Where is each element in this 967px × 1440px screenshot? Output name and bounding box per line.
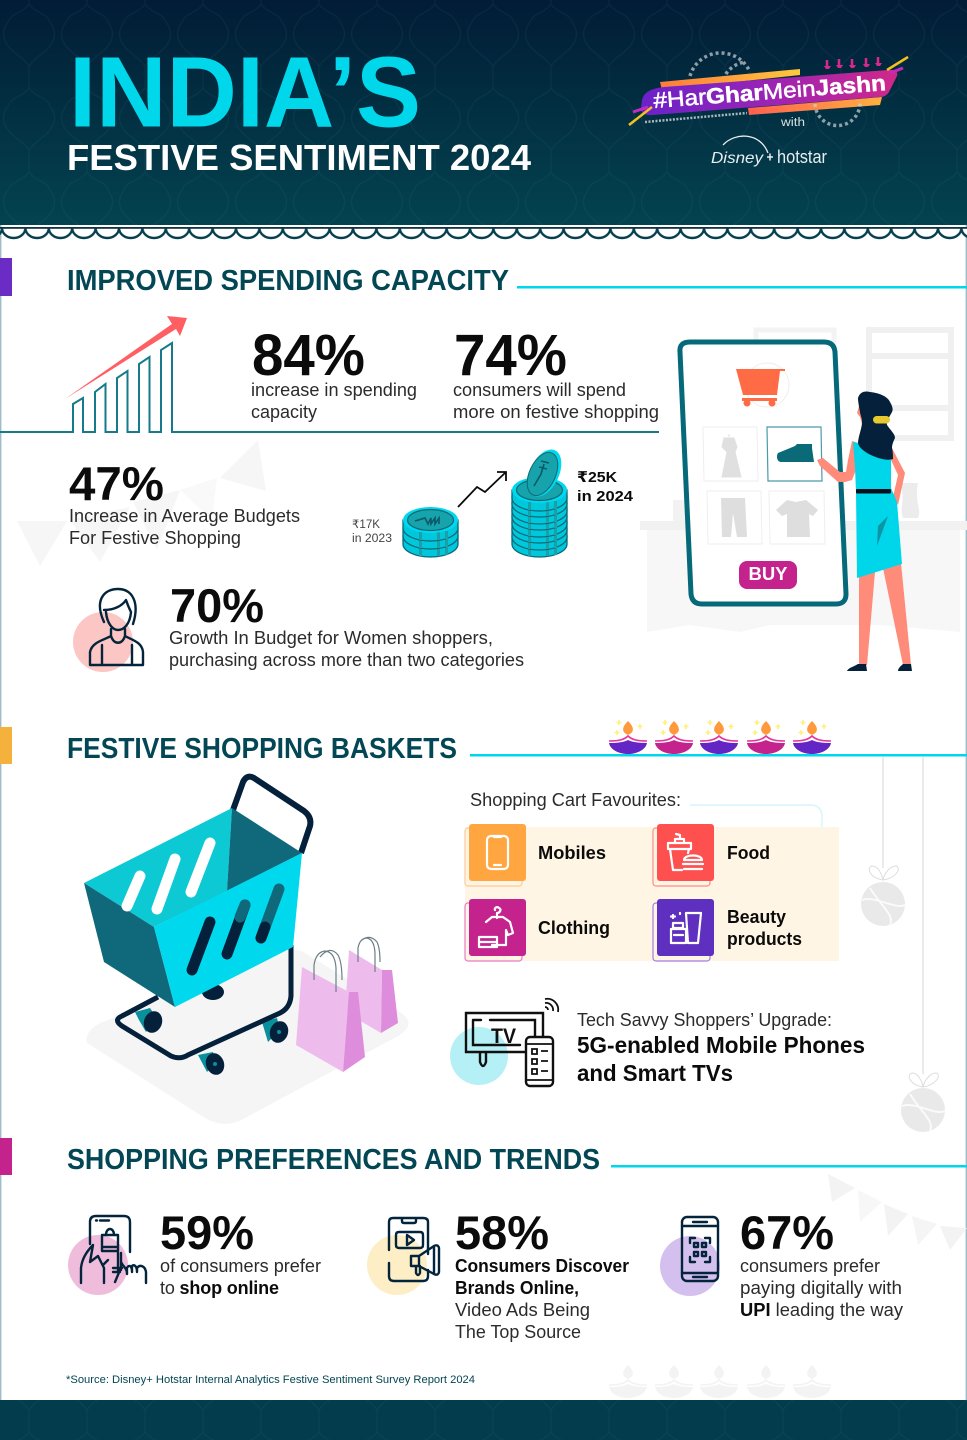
icon: woman shopper [73, 589, 143, 672]
big coin stack [512, 444, 568, 557]
subtitle: FESTIVE SENTIMENT 2024 [67, 137, 531, 178]
item: mobiles: Mobiles [538, 843, 606, 863]
chart icon: growth bars with arrow [0, 316, 659, 432]
stat: 59%: of consumers prefer [160, 1256, 321, 1276]
item: beauty products [653, 899, 802, 961]
text: tech savvy shoppers: Tech Savvy Shoppers’ Upgrade: [577, 1010, 832, 1030]
text: tech savvy shoppers [577, 1010, 865, 1086]
panel: bunting left [17, 440, 266, 566]
stat: 59% [160, 1206, 321, 1298]
item: clothing [465, 899, 610, 961]
stat: 59%: to shop online [160, 1278, 279, 1298]
floor shadow [87, 949, 409, 1124]
illustration: shopping cart [84, 777, 409, 1124]
stat: 58%: Consumers Discover [455, 1256, 629, 1276]
chart: coin stacks 2023 vs 2024: ₹17K [352, 519, 380, 531]
heading: shopping cart favourites: Shopping Cart Favourites: [470, 790, 681, 810]
phone frame [680, 342, 846, 604]
small coin stack [403, 507, 458, 557]
campaign logo: #HarGharMeinJashn [652, 70, 887, 113]
source note: *Source: Disney+ Hotstar Internal Analytics Festive Sentiment Survey Report 2024 [66, 1374, 475, 1386]
icon: TV and phone [450, 999, 558, 1086]
panel: cart favourites [465, 824, 839, 961]
item: beauty products: Beauty [727, 907, 786, 927]
campaign logo: with [780, 117, 805, 129]
stat: 67%: consumers prefer [740, 1256, 880, 1276]
footer band [0, 1400, 967, 1440]
woman figure [817, 392, 912, 671]
illustration: phone shop with woman [680, 342, 912, 671]
stat: 47%: For Festive Shopping [69, 528, 241, 548]
chart: coin stacks 2023 vs 2024: in 2023 [352, 533, 392, 545]
faded diyas [609, 1365, 831, 1398]
stat: 58%: Brands Online, [455, 1278, 579, 1298]
title: INDIA'S: INDIA’S [69, 36, 421, 148]
hanging ornaments [861, 757, 945, 1132]
stat: 67% [740, 1206, 903, 1320]
item: mobiles [465, 824, 606, 886]
stat: 59%: 59% [160, 1206, 254, 1259]
stat: 84%: 84% [252, 323, 365, 388]
icon row: diyas [609, 720, 831, 754]
stat: 84%: capacity [251, 402, 317, 422]
item: clothing: Clothing [538, 918, 610, 938]
section marker: yellow [0, 727, 12, 764]
heading: shopping preferences and trends: SHOPPING PREFERENCES AND TRENDS [67, 1144, 600, 1176]
button: BUY: BUY [748, 564, 788, 584]
product: dress [703, 427, 758, 481]
campaign logo: Disney [711, 150, 764, 167]
stat: 84% [251, 323, 417, 422]
item: food [653, 824, 770, 886]
stat: 74%: consumers will spend [453, 380, 626, 400]
section marker: purple [0, 258, 12, 296]
stat: 74%: 74% [454, 323, 567, 388]
back wheels and frame [118, 945, 291, 1077]
chart: coin stacks 2023 vs 2024 [352, 444, 634, 557]
stat: 74% [453, 323, 659, 422]
stat: 47%: Increase in Average Budgets [69, 506, 300, 526]
stat: 70%: purchasing across more than two categories [169, 650, 524, 670]
stat: 67%: paying digitally with [740, 1278, 902, 1298]
heading: festive shopping baskets: FESTIVE SHOPPING BASKETS [67, 733, 457, 765]
stat: 70%: 70% [170, 579, 264, 632]
section marker: magenta [0, 1138, 12, 1175]
stat: 67%: UPI leading the way [740, 1300, 903, 1320]
product: trousers [707, 491, 762, 544]
icon: cart in phone [736, 363, 789, 407]
chart: coin stacks 2023 vs 2024: ₹25K [577, 469, 617, 486]
icon: UPI payment [660, 1217, 720, 1296]
icon: trend arrow [458, 472, 506, 507]
product: shoe selected [767, 427, 822, 481]
shopping bags [296, 937, 398, 1072]
item: food: Food [727, 843, 770, 863]
stat: 70% [169, 579, 524, 670]
text: tech savvy shoppers: and Smart TVs [577, 1060, 733, 1086]
stat: 58%: Video Ads Being [455, 1300, 590, 1320]
button: BUY [739, 561, 797, 589]
campaign logo: hotstar [777, 147, 827, 167]
icon: rising arrow [65, 316, 187, 399]
stat: 58%: The Top Source [455, 1322, 581, 1342]
scalloped divider [0, 227, 967, 240]
icon: shop online [68, 1216, 146, 1295]
icon: video ads [367, 1218, 439, 1295]
panel: background room illustration [640, 330, 967, 632]
stat: 47%: 47% [69, 457, 164, 510]
bunting right [828, 1174, 967, 1250]
handle [233, 777, 310, 853]
stat: 84%: increase in spending [251, 380, 417, 400]
text: tech savvy shoppers: 5G-enabled Mobile Phones [577, 1032, 865, 1058]
stat: 58% [455, 1206, 629, 1342]
stat: 74%: more on festive shopping [453, 402, 659, 422]
heading: improved spending capacity: IMPROVED SPENDING CAPACITY [67, 265, 509, 297]
stat: 47% [69, 457, 300, 548]
stat: 67%: 67% [740, 1206, 834, 1259]
stat: 58%: 58% [455, 1206, 549, 1259]
header banner [0, 0, 967, 225]
item: beauty products: products [727, 929, 802, 949]
stat: 70%: Growth In Budget for Women shoppers, [169, 628, 493, 648]
product: t-shirt [769, 491, 825, 544]
basket [84, 808, 302, 1007]
chart: coin stacks 2023 vs 2024: in 2024 [577, 488, 634, 505]
campaign logo [629, 53, 908, 167]
icon: TV and phone: TV [491, 1025, 516, 1048]
